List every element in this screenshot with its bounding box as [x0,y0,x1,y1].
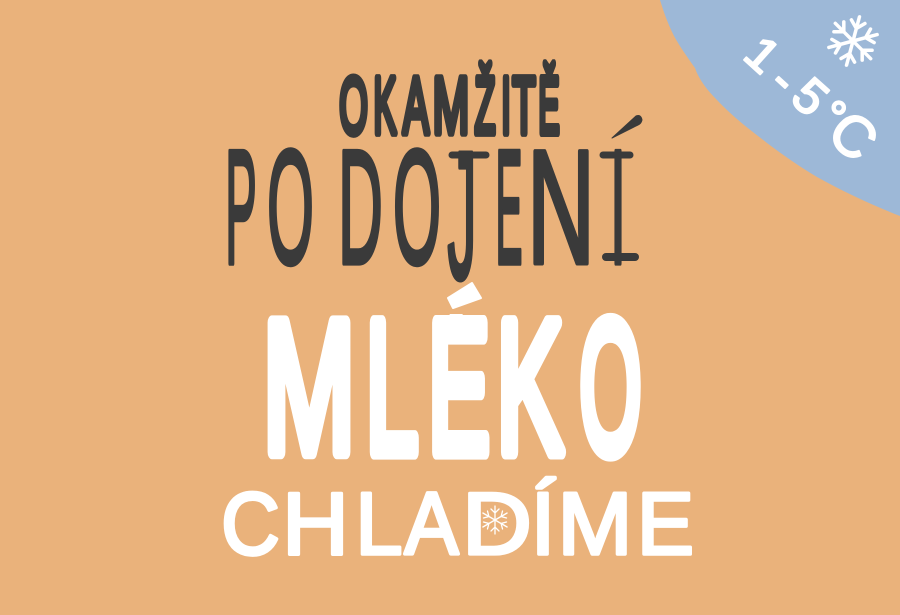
heading line: PO DOJENÍ: N [527,117,595,298]
heading line: OKAMŽITĚ: M [433,61,469,150]
blue corner shape [660,0,900,216]
icon: large snowflake [822,10,884,72]
heading line: PO DOJENÍ: E [495,118,523,299]
main word: MLÉKO: L [366,283,418,492]
main word: CHLADÍME: D [462,474,532,573]
temperature label: 1-5 °C: 1 [734,26,790,84]
temperature label: 1-5 °C: 5 [781,67,839,127]
temperature label: 1-5 °C: - [759,53,809,106]
corner panel: temperature [660,0,900,216]
heading line: PO DOJENÍ: O [267,116,314,297]
infographic canvas [224,0,900,557]
temperature label: 1-5 °C [734,26,890,174]
main word: MLÉKO: M [263,281,355,492]
main word: CHLADÍME: L [356,475,402,573]
temperature label: 1-5 °C: C [816,99,890,174]
temperature label: 1-5 °C: ° [809,90,856,140]
main word: MLÉKO: K [497,282,563,492]
heading line: OKAMŽITĚ: O [339,62,368,151]
heading line: OKAMŽITĚ [339,61,560,151]
heading line: PO DOJENÍ: J [447,114,477,317]
heading line: PO DOJENÍ: D [338,116,383,297]
heading line: PO DOJENÍ: O [393,116,441,297]
main word: CHLADÍME: M [558,475,632,573]
main word: MLÉKO: É [428,283,490,493]
heading line: OKAMŽITĚ: Ž [474,62,496,151]
main word: CHLADÍME: H [282,475,349,574]
heading line: PO DOJENÍ [228,115,642,282]
heading line: OKAMŽITĚ: T [512,62,536,151]
heading line: PO DOJENÍ: P [225,118,257,298]
heading line: OKAMŽITĚ: Ě [538,61,560,150]
heading line: OKAMŽITĚ: K [374,62,396,151]
main word: CHLADÍME: E [637,476,694,573]
main word: CHLADÍME: C [221,474,280,573]
heading line: OKAMŽITĚ: A [403,62,429,151]
heading line: PO DOJENÍ: Í [610,116,626,298]
main word: MLÉKO: O [580,281,641,492]
main word: CHLADÍME: Í [531,474,556,573]
icon: small snowflake inside letter D [481,506,509,534]
main word: CHLADÍME: A [404,474,459,573]
main word: CHLADÍME [221,474,694,574]
heading line: OKAMŽITĚ: I [501,62,511,151]
main word: MLÉKO [268,282,641,462]
